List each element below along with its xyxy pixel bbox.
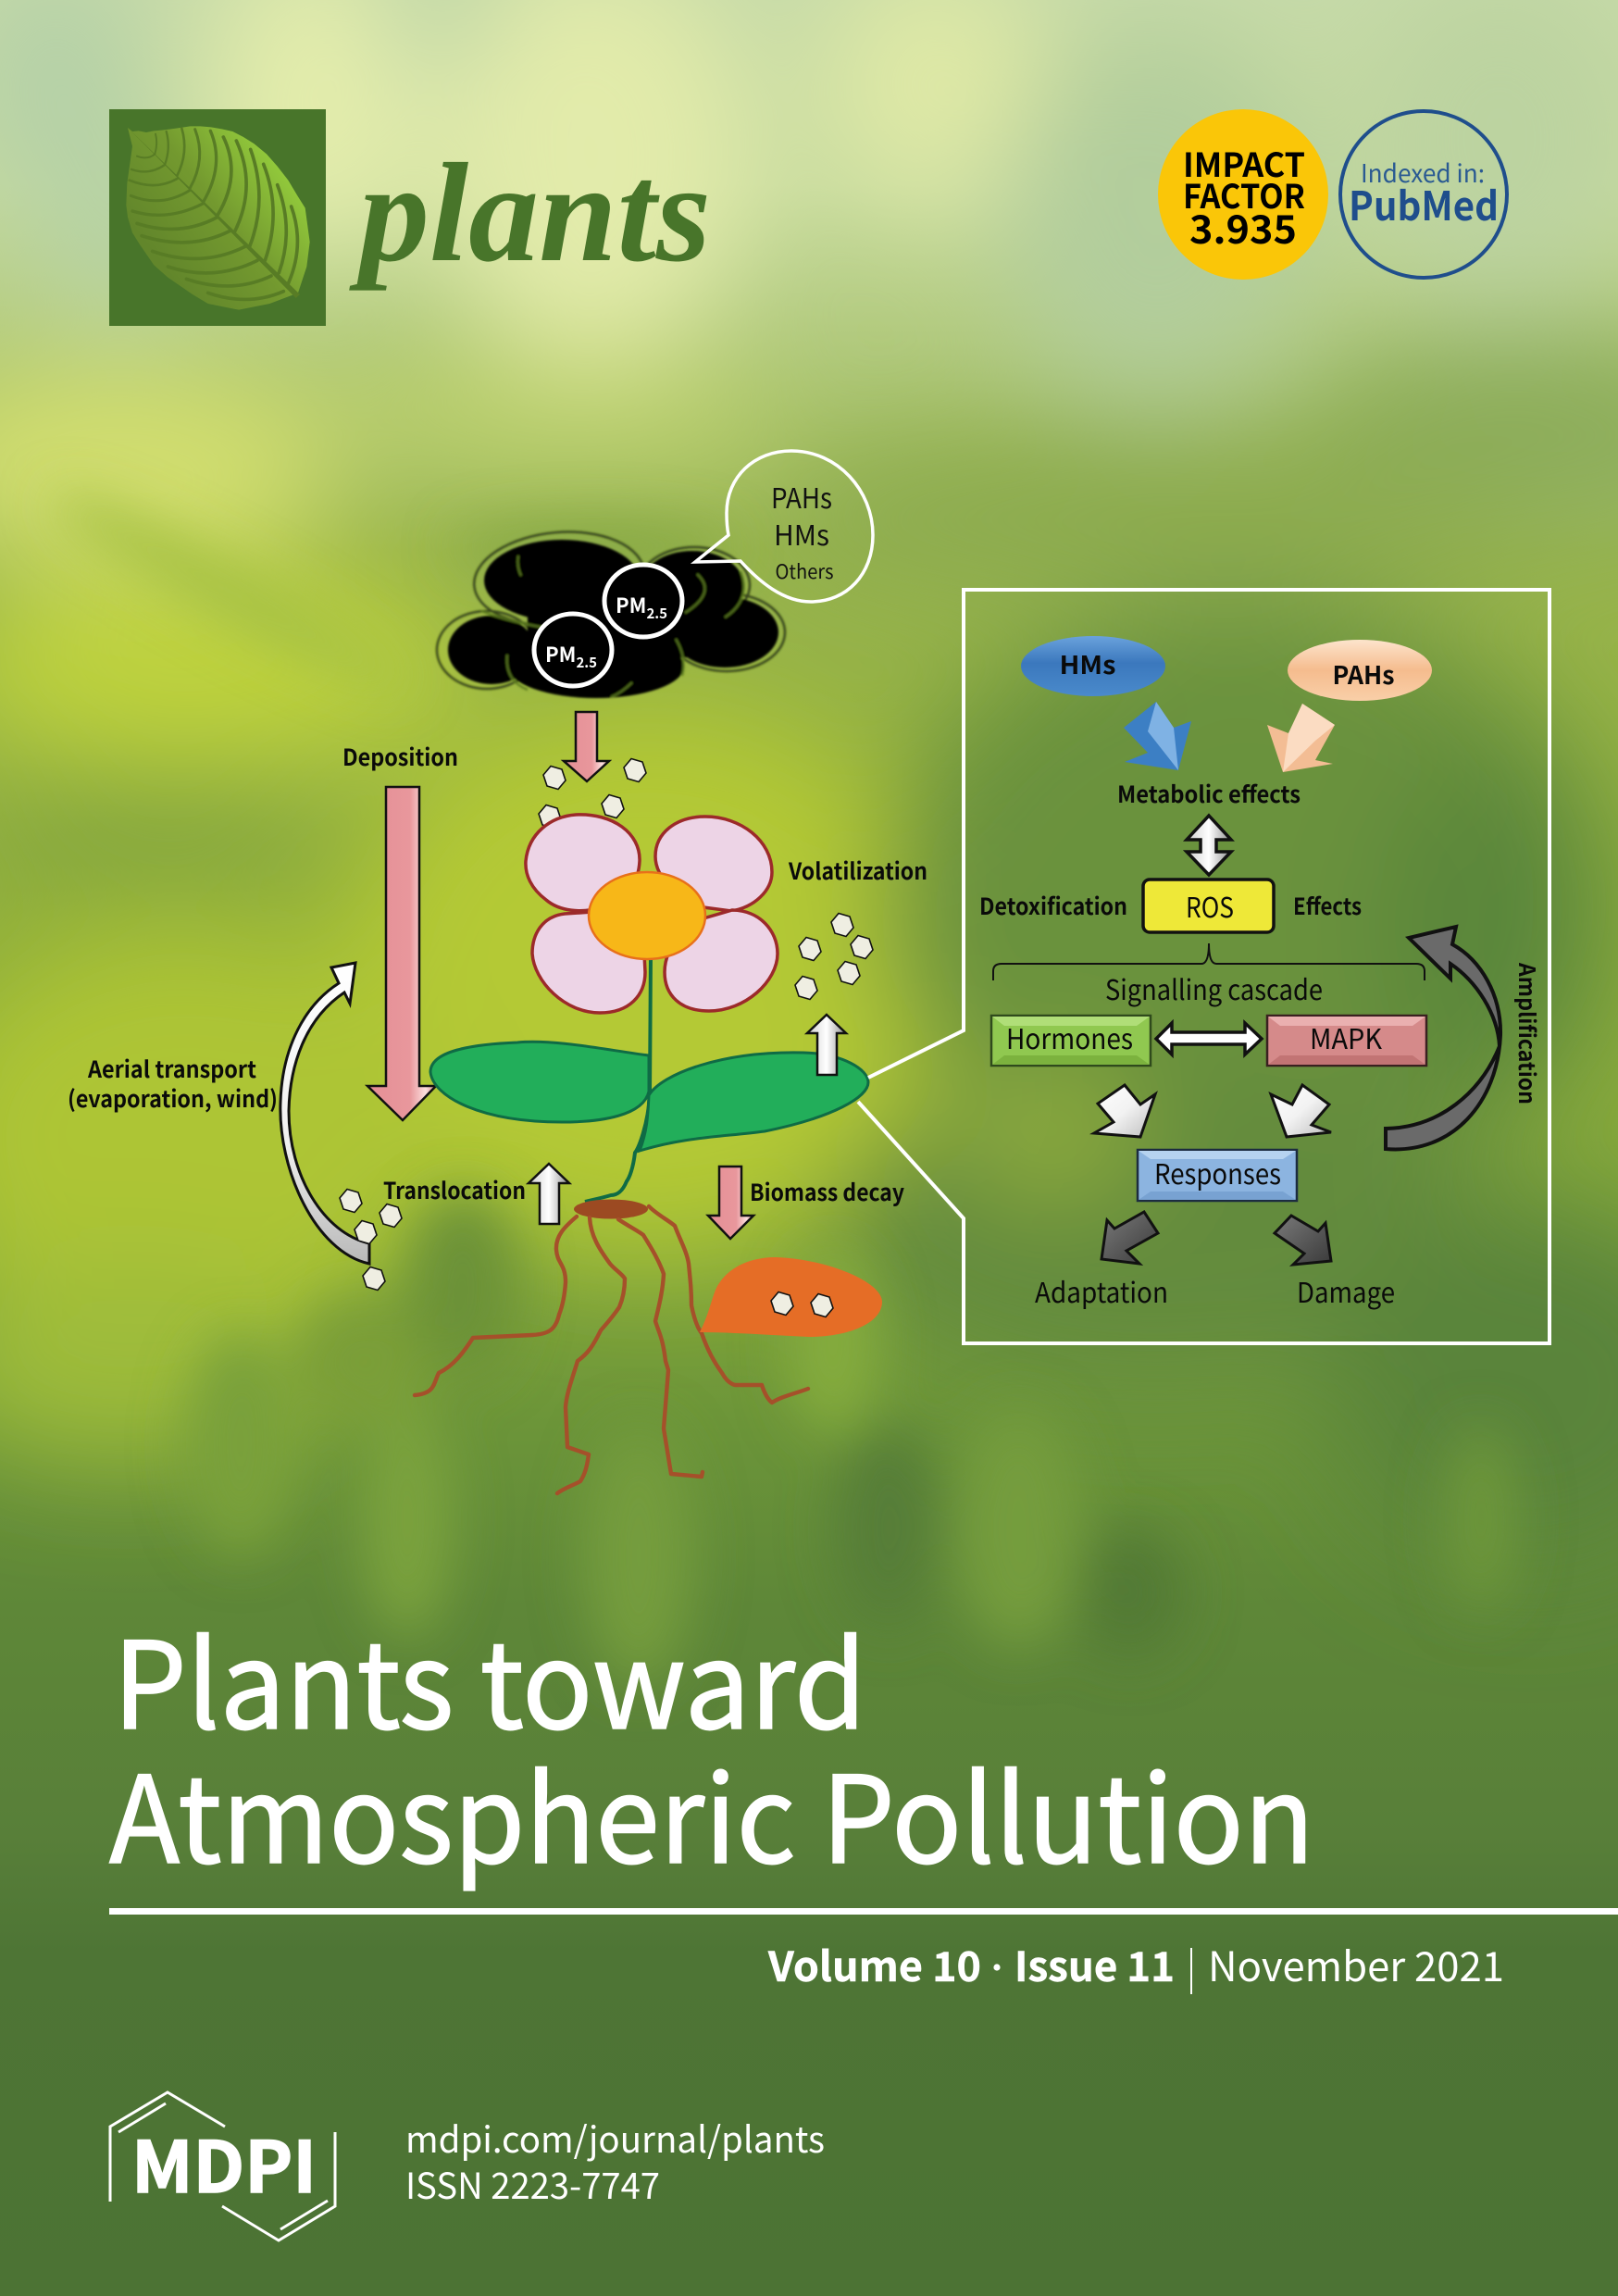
- panel: signalling diagram: [979, 636, 1545, 1311]
- illustration: plant: [415, 815, 868, 1493]
- journal name: plants: plants: [349, 135, 711, 292]
- title: Atmospheric Pollution: [109, 1724, 1314, 1898]
- badge: impact factor: FACTOR: [1183, 170, 1305, 218]
- label: Signalling cascade: Signalling cascade: [1105, 967, 1323, 1008]
- circle: PM2.5 upper: 2.5: [646, 604, 667, 623]
- circle: PM2.5 lower: [534, 614, 612, 686]
- PAHs ellipse: [1288, 640, 1432, 701]
- label: Effects: Effects: [1293, 889, 1362, 922]
- leaf: left: [430, 1042, 649, 1122]
- label: Translocation: Translocation: [383, 1173, 526, 1206]
- particles: aerial: [340, 1189, 402, 1291]
- issue line: Issue 11: [1014, 1934, 1175, 1993]
- journal url and ISSN: mdpi.com/journal/plants: [405, 2112, 825, 2164]
- box: Responses: [1138, 1150, 1297, 1201]
- label: Damage: Damage: [1297, 1270, 1395, 1311]
- label: aerial transport: [68, 1052, 278, 1115]
- illustration: decayed leaf: [700, 1257, 882, 1337]
- arrow: blue: [1124, 702, 1191, 770]
- logo: MDPI: [110, 2092, 335, 2240]
- HMs ellipse: [1021, 636, 1165, 696]
- badge: indexed in PubMed: [1340, 111, 1507, 278]
- arrow: deposition: [367, 787, 436, 1120]
- label: Metabolic effects: Metabolic effects: [1117, 777, 1301, 810]
- badge: indexed in PubMed: Indexed in:: [1361, 154, 1485, 190]
- badge: indexed in PubMed: PubMed: [1349, 175, 1499, 232]
- circle: PM2.5 upper: PM: [616, 590, 646, 619]
- box: MAPK: [1267, 1016, 1426, 1066]
- circle: PM2.5 upper: [604, 565, 682, 637]
- petal: bottom right: [665, 910, 778, 1011]
- issue line: November 2021: [1208, 1934, 1504, 1993]
- particles: volatilized: [795, 913, 873, 1000]
- particles: near flower: [539, 759, 646, 828]
- HMs ellipse: HMs: [1059, 645, 1116, 681]
- arrow: to damage: [1275, 1216, 1331, 1265]
- journal url and ISSN: ISSN 2223-7747: [405, 2158, 660, 2210]
- arrow: peach: [1267, 704, 1335, 772]
- issue line: [767, 1934, 1504, 1994]
- leaf: right: [640, 1053, 868, 1151]
- petal: top right: [655, 817, 772, 911]
- badge: impact factor: IMPACT: [1183, 139, 1305, 187]
- label: aerial transport: Aerial transport: [87, 1052, 256, 1085]
- logo: MDPI: MDPI: [131, 2111, 317, 2213]
- petal: bottom left: [532, 912, 645, 1013]
- brace: [993, 943, 1425, 980]
- illustration: pollution cloud: [437, 525, 785, 698]
- speech bubble: pollutants: HMs: [774, 513, 829, 554]
- box: Responses: Responses: [1154, 1152, 1281, 1192]
- label: Biomass decay: Biomass decay: [750, 1175, 905, 1208]
- title: Plants toward: [113, 1590, 866, 1764]
- arrow: cloud to flower: [564, 712, 609, 781]
- circle: PM2.5 lower: PM: [545, 639, 576, 668]
- divider rule: [109, 1908, 1618, 1915]
- box: MAPK: MAPK: [1310, 1017, 1383, 1057]
- arrow: hormones to responses: [1094, 1085, 1155, 1137]
- title: [109, 1590, 1314, 1898]
- arrow: translocation up: [529, 1164, 569, 1224]
- flower centre: [589, 872, 705, 959]
- arrow: to adaptation: [1101, 1212, 1158, 1264]
- label: Amplification: Amplification: [1512, 962, 1545, 1104]
- journal url and ISSN: [405, 2112, 825, 2210]
- box: Hormones: [991, 1016, 1151, 1066]
- speech bubble: pollutants: Others: [776, 557, 834, 585]
- roots: [415, 1206, 808, 1493]
- root collar: [574, 1200, 648, 1218]
- speech bubble: pollutants: [695, 451, 873, 602]
- label: aerial transport: (evaporation, wind): [68, 1081, 278, 1115]
- box: ROS: ROS: [1186, 885, 1234, 926]
- speech bubble: pollutants: PAHs: [771, 476, 832, 517]
- petal: top left: [526, 815, 640, 911]
- box: Hormones: Hormones: [1006, 1017, 1133, 1057]
- arrow: hormones to MAPK: [1156, 1023, 1262, 1054]
- arrow: volatilization up: [807, 1015, 846, 1075]
- issue line: Volume 10: [767, 1934, 981, 1993]
- badge: impact factor: [1158, 109, 1328, 280]
- label: Volatilization: Volatilization: [788, 854, 927, 887]
- logo: plants leaf icon: [109, 109, 326, 326]
- stem: [585, 954, 651, 1202]
- label: Detoxification: Detoxification: [979, 889, 1127, 922]
- badge: impact factor: 3.935: [1189, 199, 1297, 256]
- label: Adaptation: Adaptation: [1035, 1270, 1168, 1311]
- arrow: metabolic to ROS: [1187, 816, 1231, 875]
- label: Deposition: Deposition: [342, 740, 458, 773]
- circle: PM2.5 lower: 2.5: [576, 653, 597, 672]
- arrow: biomass decay: [708, 1167, 753, 1239]
- panel: leaf detail callout frame: [858, 590, 1550, 1343]
- arrow: aerial transport curve: [280, 963, 369, 1264]
- arrow: amplification curve: [1386, 927, 1500, 1149]
- box: ROS: [1143, 880, 1274, 932]
- PAHs ellipse: PAHs: [1333, 655, 1394, 692]
- arrow: MAPK to responses: [1271, 1085, 1331, 1137]
